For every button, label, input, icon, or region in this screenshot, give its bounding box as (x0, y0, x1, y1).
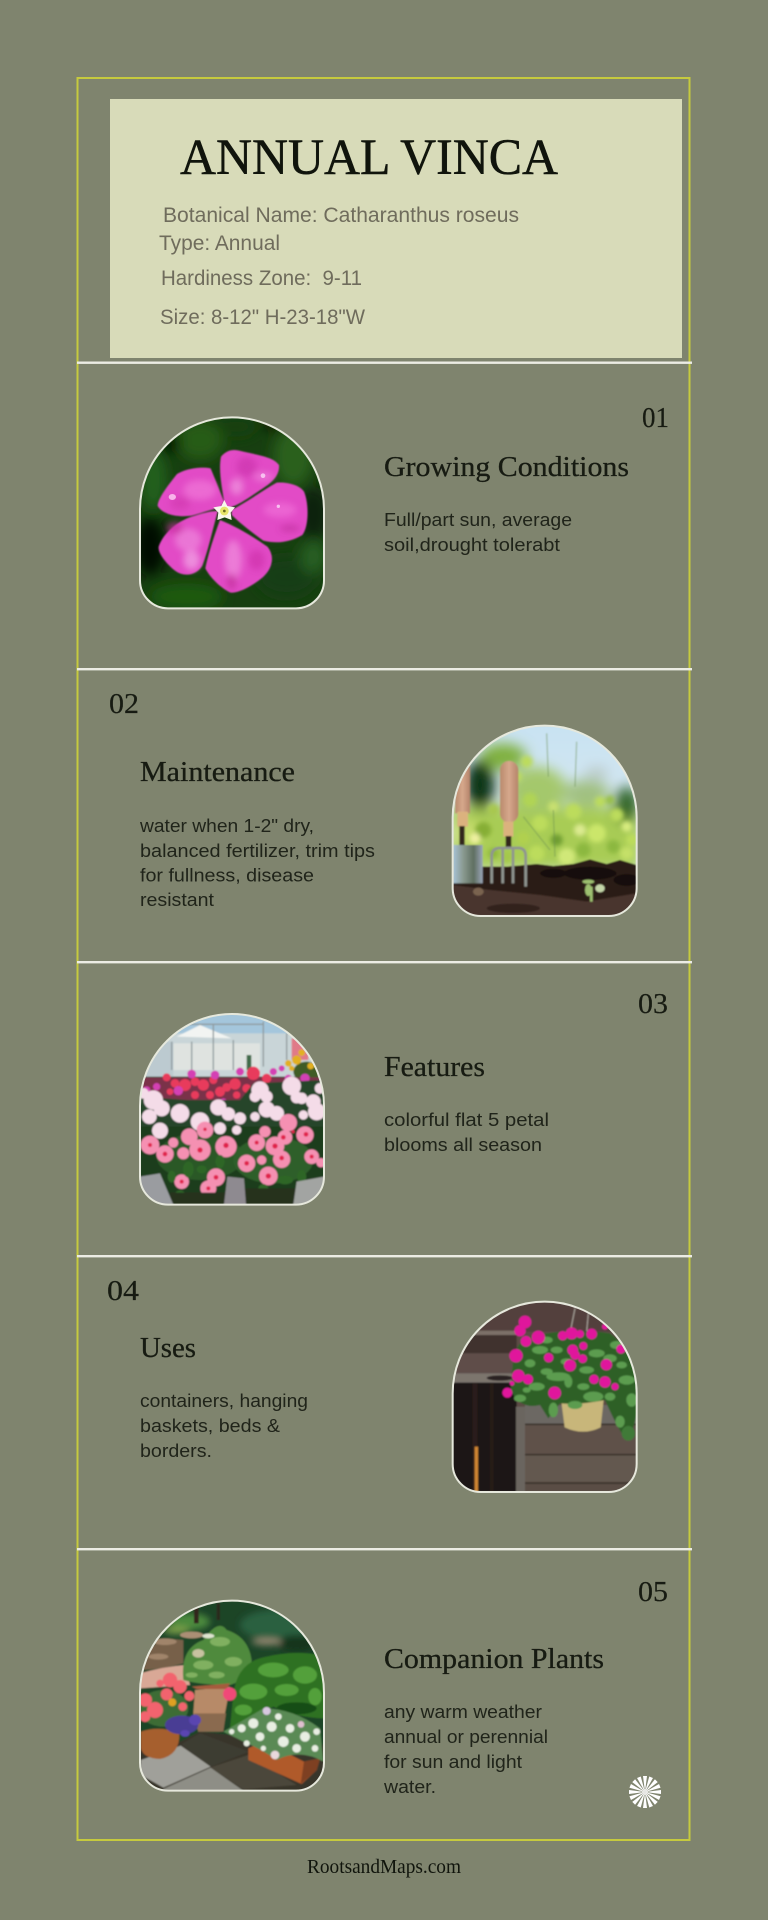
section 1: growing conditions (133, 402, 669, 610)
hardiness zone: Hardiness Zone: 9-11 (161, 267, 362, 290)
photo: greenhouse of pink vinca (138, 1014, 326, 1207)
body: features: colorful flat 5 petal (384, 1110, 549, 1130)
body: maintenance: for fullness, disease (140, 866, 314, 886)
botanical name: Botanical Name: Catharanthus roseus (163, 204, 519, 227)
number 05: 05 (638, 1576, 668, 1608)
infographic page (76, 77, 692, 1878)
icon: white sunburst (629, 1776, 661, 1808)
section 4: uses (107, 1275, 637, 1492)
heading: companion plants: Companion Plants (384, 1643, 604, 1675)
body: companion plants: for sun and light (384, 1752, 522, 1772)
outer frame (78, 78, 690, 1840)
number 03: 03 (638, 988, 668, 1020)
body: growing conditions: Full/part sun, average (384, 510, 572, 530)
type: Type: Annual (159, 232, 280, 255)
body: uses: baskets, beds & (140, 1416, 280, 1436)
body: maintenance: resistant (140, 890, 214, 910)
photo: patio container garden (138, 1601, 324, 1791)
body: uses: borders. (140, 1441, 212, 1461)
number 01: 01 (642, 402, 669, 434)
photo: garden fork and trowel in soil (450, 726, 640, 916)
body: maintenance: balanced fertilizer, trim tips (140, 841, 375, 861)
footer: website: RootsandMaps.com (307, 1856, 461, 1878)
body: companion plants: any warm weather (384, 1702, 542, 1722)
section 2: maintenance (109, 688, 640, 916)
heading: growing conditions: Growing Conditions (384, 451, 629, 483)
number 04: 04 (107, 1275, 140, 1307)
body: companion plants: annual or perennial (384, 1727, 548, 1747)
section 3: features (138, 988, 668, 1207)
heading: maintenance: Maintenance (140, 756, 295, 788)
body: uses: containers, hanging (140, 1391, 308, 1411)
heading: features: Features (384, 1051, 485, 1083)
number 02: 02 (109, 688, 139, 720)
title: ANNUAL VINCA (180, 130, 558, 186)
size: Size: 8-12" H-23-18"W (160, 306, 365, 329)
body: maintenance: water when 1-2" dry, (139, 816, 314, 836)
body: features: blooms all season (384, 1135, 542, 1155)
body: features (384, 1110, 549, 1155)
heading: uses: Uses (140, 1332, 196, 1364)
body: growing conditions: soil,drought tolerabt (384, 535, 560, 555)
photo: hanging basket of magenta vinca (453, 1302, 637, 1492)
body: companion plants (383, 1702, 548, 1797)
body: uses (140, 1391, 308, 1461)
body: growing conditions (384, 510, 572, 555)
body: maintenance (139, 816, 375, 910)
header panel (110, 99, 682, 358)
body: companion plants: water. (383, 1777, 436, 1797)
section 5: companion plants (138, 1576, 668, 1808)
photo: pink vinca flower (133, 415, 330, 610)
